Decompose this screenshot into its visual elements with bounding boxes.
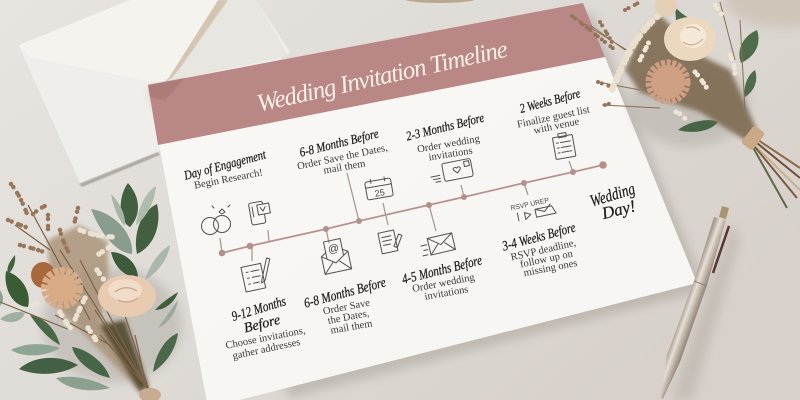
milestone: 2 weeks before: Finalize guest list bbox=[516, 104, 591, 131]
left bouquet leaves bbox=[0, 183, 178, 390]
milestone: 4-5 months before: invitations bbox=[424, 284, 469, 303]
dried filler sprigs bbox=[8, 184, 78, 255]
icon: checklist and pencil bbox=[240, 257, 275, 292]
coffee cup edge at top bbox=[402, 0, 478, 3]
icon: calendar: 25 bbox=[374, 187, 385, 199]
milestone: 2 weeks before: with venue bbox=[533, 116, 581, 137]
milestone: 3-4 weeks before: follow up on bbox=[519, 248, 575, 271]
icon: wedding rings bbox=[202, 205, 230, 234]
cream filler bbox=[33, 230, 113, 340]
icon: flying envelope bbox=[419, 233, 455, 257]
milestone: day of engagement: Day of Engagement bbox=[182, 146, 268, 183]
milestone: 4-5 months before: Order wedding bbox=[411, 272, 476, 295]
milestone: 6-8 months before, lower bbox=[303, 276, 388, 337]
thin twigs bbox=[570, 2, 745, 110]
top flower bbox=[655, 0, 677, 17]
peach daisy bbox=[45, 271, 79, 305]
icon: notepad and pen bbox=[378, 229, 405, 254]
milestone: 6-8 months before, lower: the Dates, bbox=[327, 308, 370, 327]
header band bbox=[148, 3, 605, 145]
left bouquet bbox=[0, 183, 182, 400]
cream rose bbox=[664, 17, 716, 61]
timeline dots bbox=[219, 161, 607, 256]
milestone: 6-8 months before, lower: 6-8 Months Before bbox=[303, 276, 388, 312]
milestone: 2 weeks before: 2 Weeks Before bbox=[518, 85, 582, 116]
milestone: 9-12 months before: Before bbox=[242, 313, 282, 336]
milestone: 3-4 weeks before bbox=[500, 221, 578, 279]
milestone: day of engagement: Begin Research! bbox=[193, 167, 264, 192]
milestone: 6-8 months before, upper: Order Save the Dates, bbox=[296, 143, 389, 173]
milestone: wedding day: Wedding bbox=[588, 179, 637, 211]
right bouquet dried mass bbox=[625, 15, 757, 142]
milestone: 6-8 months before, upper: mail them bbox=[323, 158, 366, 177]
milestone: 2-3 months before: invitations bbox=[428, 146, 473, 163]
pen body bbox=[661, 217, 726, 399]
pen cap bbox=[719, 206, 729, 219]
milestone: 6-8 months before, lower: Order Save bbox=[322, 298, 371, 317]
right bouquet stem ends bbox=[750, 136, 800, 208]
milestone: 2-3 months before: Order wedding bbox=[416, 133, 481, 155]
panel: timeline card bbox=[148, 3, 706, 400]
milestone: 9-12 months before bbox=[225, 294, 306, 362]
milestone: 3-4 weeks before: missing ones bbox=[523, 258, 578, 279]
milestone: 3-4 weeks before: RSVP deadline, bbox=[510, 238, 577, 263]
milestone: 6-8 months before, upper: 6-8 Months Before bbox=[298, 126, 380, 160]
peach strawflower bbox=[649, 63, 687, 101]
envelope bbox=[19, 0, 290, 187]
timeline line bbox=[222, 165, 603, 253]
milestone: 2 weeks before bbox=[516, 85, 591, 137]
pen clip bbox=[713, 226, 729, 273]
milestone: 4-5 months before: 4-5 Months Before bbox=[401, 253, 484, 288]
milestone: 9-12 months before: 9-12 Months bbox=[230, 294, 288, 325]
cream rose bbox=[98, 275, 156, 317]
milestone: 2-3 months before: 2-3 Months Before bbox=[404, 110, 486, 144]
twine bbox=[741, 125, 765, 151]
cream filler bbox=[612, 14, 660, 90]
icon: RSVP note: RSVP UREP bbox=[510, 197, 550, 212]
left bouquet stems bbox=[0, 205, 150, 393]
card paper bbox=[148, 3, 697, 400]
title: Wedding Invitation Timeline bbox=[254, 36, 510, 118]
brown sprigs bbox=[572, 2, 640, 105]
milestone: day of engagement bbox=[182, 146, 268, 192]
icon: postcard with heart bbox=[429, 158, 473, 184]
left bouquet dried mass bbox=[48, 225, 150, 392]
milestone: wedding day: Day! bbox=[599, 196, 637, 223]
icon: phone bbox=[248, 200, 272, 225]
milestone: 9-12 months before: Choose invitations, bbox=[225, 325, 306, 352]
icon: calendar bbox=[364, 176, 393, 200]
right bouquet leaves bbox=[675, 7, 759, 132]
milestone: 6-8 months before, upper bbox=[296, 126, 389, 177]
milestone: 9-12 months before: gather addresses bbox=[232, 337, 301, 362]
milestone: wedding day bbox=[588, 179, 637, 223]
milestone: 6-8 months before, lower: mail them bbox=[330, 318, 373, 337]
icon: clipboard bbox=[552, 131, 576, 160]
burnt orange bloom bbox=[31, 262, 55, 288]
twine bbox=[139, 388, 161, 400]
milestone: 3-4 weeks before: 3-4 Weeks Before bbox=[500, 221, 577, 255]
pen bbox=[661, 206, 740, 400]
icon: email envelope bbox=[319, 237, 352, 274]
milestone: 4-5 months before bbox=[401, 253, 484, 303]
right bouquet bbox=[570, 0, 800, 208]
icon: RSVP note bbox=[510, 196, 556, 222]
milestone: 2-3 months before bbox=[404, 110, 486, 163]
timeline stems bbox=[220, 161, 573, 261]
envelope flap bbox=[19, 0, 218, 82]
icon: email envelope: @ bbox=[327, 242, 340, 256]
